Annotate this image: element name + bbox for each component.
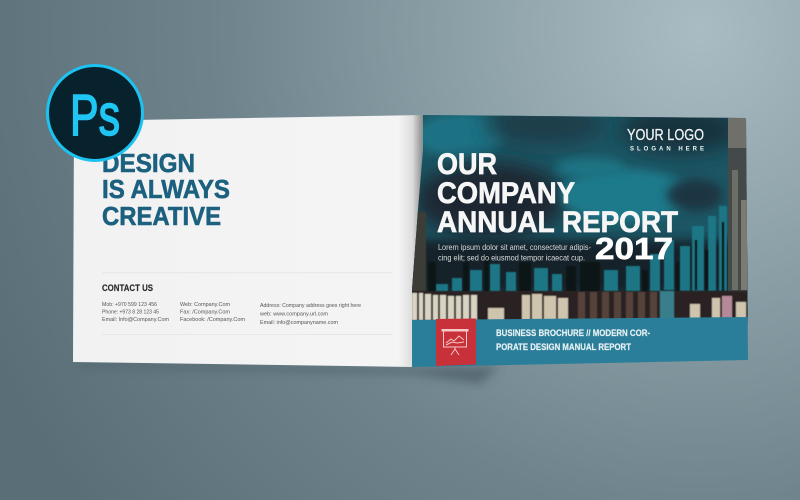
- panel: right cover: [405, 105, 755, 370]
- Photoshop badge: [48, 66, 142, 160]
- contact column: web: Facebook: /Company.Com: [180, 317, 246, 323]
- heading: design is always creative: CREATIVE: [102, 201, 221, 231]
- logo: [627, 128, 704, 150]
- bottom teal band: [405, 317, 750, 370]
- cover title: ANNUAL REPORT: [437, 206, 678, 239]
- heading: design is always creative: IS ALWAYS: [102, 174, 230, 204]
- panel: left page: [73, 115, 423, 367]
- logo: SLOGAN HERE: [630, 146, 704, 152]
- cover title: COMPANY: [437, 177, 575, 210]
- cover photo: teal city skyline: [405, 105, 755, 325]
- cover title: [437, 152, 678, 233]
- lorem text: [438, 244, 591, 262]
- icon: presentation board: [442, 330, 468, 355]
- contact column: phone: Phone: +973 8 28 123 45: [102, 310, 159, 316]
- contact column: phone: [102, 302, 170, 323]
- right edge strip: [728, 118, 748, 148]
- teal towers: [434, 206, 727, 292]
- contact column: phone: Email: Info@Company.Com: [102, 317, 170, 323]
- lorem text: cing elit; sed do eiusmod tempor icaecat cup.: [438, 252, 585, 262]
- red icon tile: [436, 318, 476, 366]
- cover title: OUR: [437, 148, 497, 181]
- contact column: address: [259, 303, 361, 326]
- band text: [496, 329, 650, 350]
- heading: design is always creative: DESIGN: [102, 148, 195, 178]
- contact column: web: [180, 302, 246, 323]
- logo: YOUR LOGO: [627, 127, 704, 144]
- brochure shadow: [80, 362, 500, 384]
- contact us heading: CONTACT US: [102, 283, 153, 294]
- contact column: web: Fax: /Company.Com: [180, 310, 231, 316]
- lorem text: Lorem ipsum dolor sit amet, consectetur adipis-: [438, 242, 591, 252]
- band text: PORATE DESIGN MANUAL REPORT: [496, 342, 631, 353]
- dark texture: [412, 212, 724, 292]
- heading: design is always creative: [102, 148, 230, 231]
- contact column: address: web: www.company.url.com: [259, 312, 329, 318]
- contact column: web: Web: Company.Com: [180, 302, 231, 308]
- contact column: address: Address: Company address goes right here: [260, 303, 361, 309]
- contact column: address: Email: info@companyname.com: [260, 320, 339, 326]
- Photoshop badge: Ps: [70, 83, 120, 148]
- lower natural-colour buildings: [405, 291, 755, 321]
- contact column: phone: Mob: +970 599 123 456: [102, 302, 157, 308]
- band text: BUSINESS BROCHURE // MODERN COR-: [496, 328, 650, 339]
- year: 2017: [595, 231, 673, 266]
